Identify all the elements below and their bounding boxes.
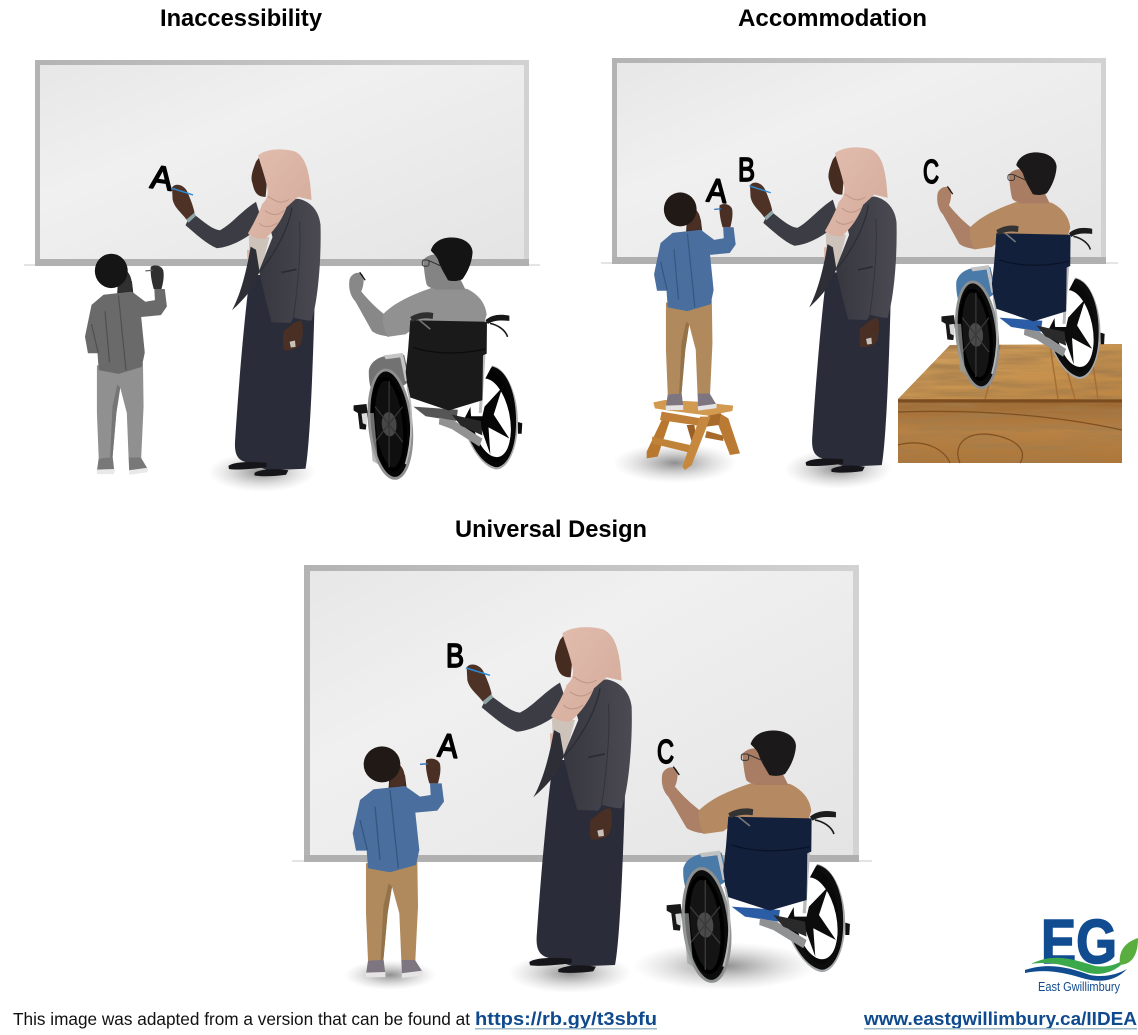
- wooden block platform: [898, 344, 1122, 463]
- figure: boy writing at his height: [353, 746, 444, 978]
- whiteboard with ledge: [601, 58, 1118, 264]
- footer credit text: This image was adapted from a version that can be found at: [13, 1009, 470, 1029]
- shadow under stool: [613, 443, 737, 483]
- letters A B C on board: C: [923, 153, 939, 190]
- logo: East Gwillimbury: EG: [1041, 908, 1117, 977]
- panel: accommodation: [601, 5, 1122, 489]
- heading: Universal Design: Universal Design: [455, 516, 647, 543]
- heading: Inaccessibility: Inaccessibility: [160, 5, 323, 32]
- shadow under teacher: [208, 452, 316, 492]
- footer link: source URL: https://rb.gy/t3sbfu: [475, 1009, 657, 1029]
- figure: teacher writing: [466, 627, 632, 973]
- whiteboard with ledge: [24, 60, 540, 266]
- letters A B C on board: A: [705, 171, 729, 210]
- letters A B C on board: C: [657, 733, 674, 770]
- figure: teacher writing: [749, 147, 897, 473]
- figure: boy unable to reach, greyscale: [85, 254, 167, 475]
- panel: inaccessibility: [24, 5, 540, 492]
- figure: man in wheelchair writing: [662, 730, 850, 984]
- letters A B C on board: [436, 637, 674, 770]
- letters A B C on board: B: [446, 637, 464, 674]
- logo: East Gwillimbury: [1025, 908, 1138, 994]
- shadow under teacher: [508, 953, 632, 993]
- letter A on board: A: [148, 158, 175, 197]
- shadow under teacher: [784, 449, 892, 489]
- figure: man in wheelchair unable to reach, greyscale: [349, 237, 522, 481]
- logo: East Gwillimbury: East Gwillimbury: [1038, 980, 1121, 994]
- shadow under boy: [344, 960, 436, 990]
- heading: Accommodation: Accommodation: [738, 5, 927, 32]
- shadow under wheelchair: [633, 942, 817, 990]
- panel: universal design: [292, 516, 872, 993]
- footer link: website: www.eastgwillimbury.ca/IIDEA: [863, 1009, 1137, 1029]
- whiteboard with ledge: [292, 565, 872, 862]
- letters A B C on board: [705, 151, 939, 210]
- letters A B C on board: B: [738, 151, 755, 188]
- figure: teacher writing: [171, 149, 321, 476]
- figure: boy on stool: [654, 192, 736, 411]
- figure: man in wheelchair on block: [937, 152, 1105, 390]
- wooden stool: [647, 400, 740, 470]
- letters A B C on board: A: [436, 726, 460, 765]
